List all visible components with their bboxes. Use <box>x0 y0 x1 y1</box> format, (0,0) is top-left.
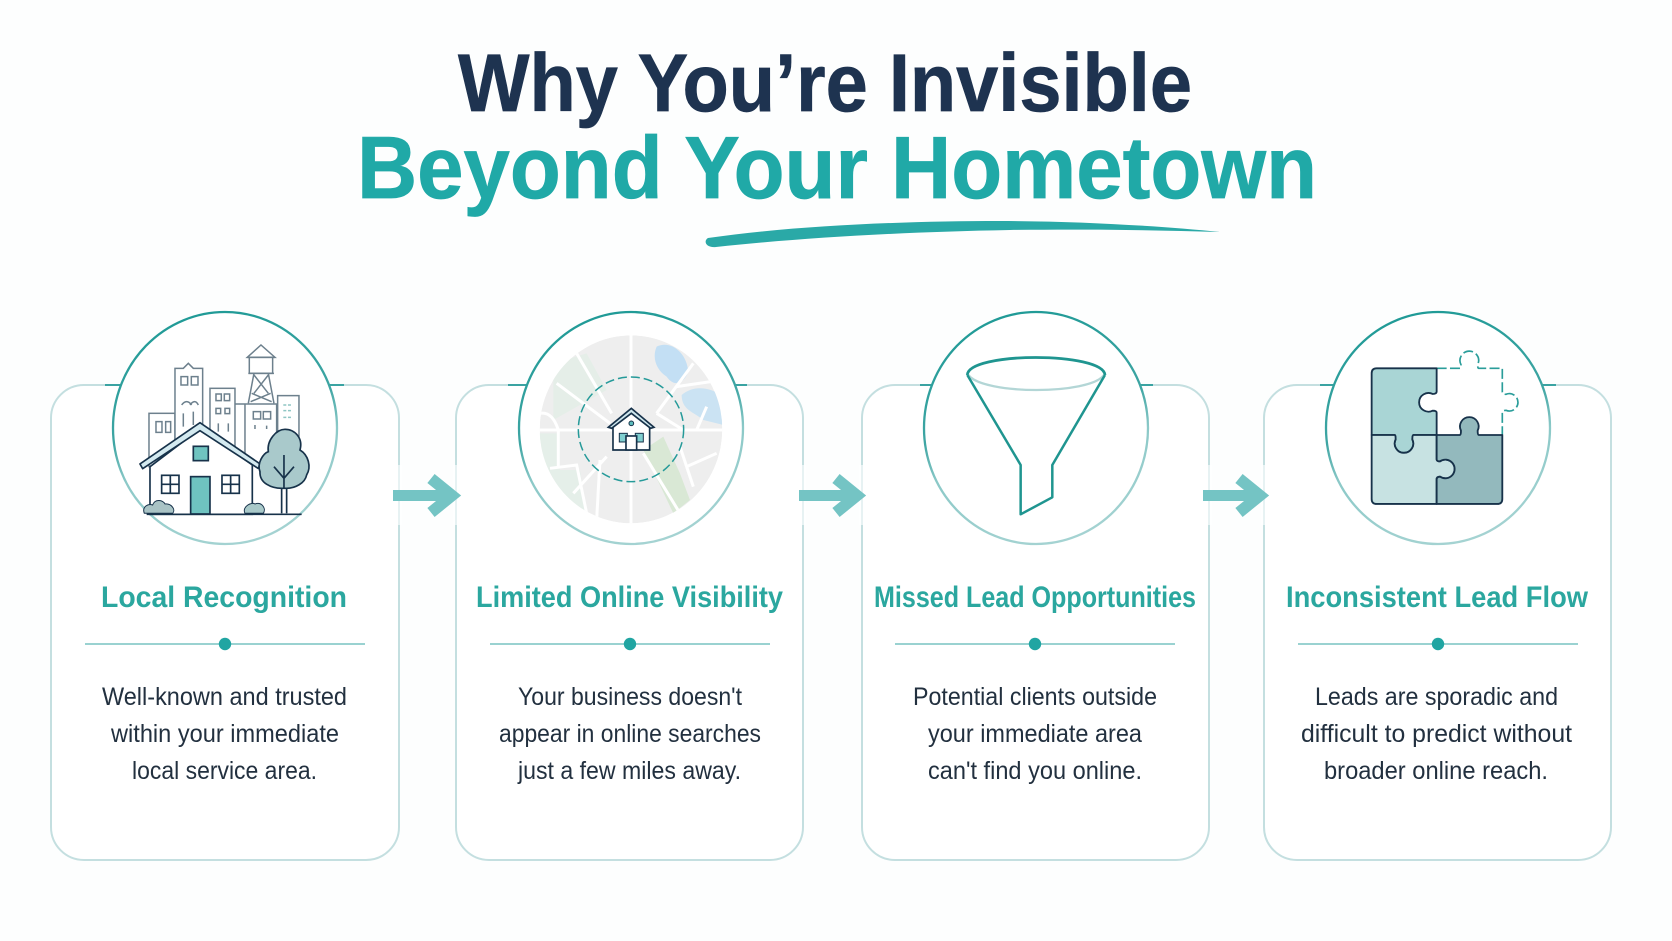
description: local service area. <box>132 757 317 785</box>
description: within your immediate <box>110 720 339 748</box>
description <box>499 683 761 785</box>
icon circle <box>1326 312 1550 544</box>
arrow 1 <box>393 478 452 512</box>
divider with dot <box>895 638 1175 650</box>
heading: Missed Lead Opportunities <box>874 581 1196 614</box>
description: appear in online searches <box>499 720 761 748</box>
icon circle <box>924 312 1148 544</box>
icon: city and house <box>140 345 309 514</box>
description: your immediate area <box>928 720 1142 748</box>
icon circle <box>113 312 337 544</box>
description <box>1301 683 1572 785</box>
title <box>357 38 1317 217</box>
arrow 3 <box>1203 478 1260 512</box>
arrow 2 <box>799 478 857 512</box>
card outline <box>1264 385 1611 860</box>
heading: Inconsistent Lead Flow <box>1286 581 1588 614</box>
description: Leads are sporadic and <box>1315 683 1558 711</box>
description: Potential clients outside <box>913 683 1157 711</box>
heading: Local Recognition <box>101 581 347 614</box>
panel: inconsistent lead flow <box>1264 312 1611 860</box>
card outline <box>51 385 399 860</box>
panel: local recognition <box>51 312 399 860</box>
icon circle <box>519 312 743 544</box>
icon: puzzle <box>1372 351 1518 504</box>
panel: missed lead opportunities <box>862 312 1209 860</box>
title underline brush stroke <box>706 221 1220 247</box>
description <box>913 683 1157 785</box>
divider with dot <box>490 638 770 650</box>
description <box>102 683 347 785</box>
divider with dot <box>1298 638 1578 650</box>
description: Well-known and trusted <box>102 683 347 711</box>
description: just a few miles away. <box>517 757 741 785</box>
description: broader online reach. <box>1324 757 1548 785</box>
heading: Limited Online Visibility <box>476 581 784 614</box>
card outline <box>862 385 1209 860</box>
panel: limited online visibility <box>456 312 803 860</box>
description: Your business doesn't <box>518 683 742 711</box>
description: difficult to predict without <box>1301 720 1572 748</box>
description: can't find you online. <box>928 757 1142 785</box>
icon: map with house <box>537 333 727 527</box>
title line 1: Why You’re Invisible <box>458 38 1192 129</box>
card outline <box>456 385 803 860</box>
icon: funnel <box>967 357 1105 514</box>
divider with dot <box>85 638 365 650</box>
title line 2: Beyond Your Hometown <box>357 118 1317 217</box>
